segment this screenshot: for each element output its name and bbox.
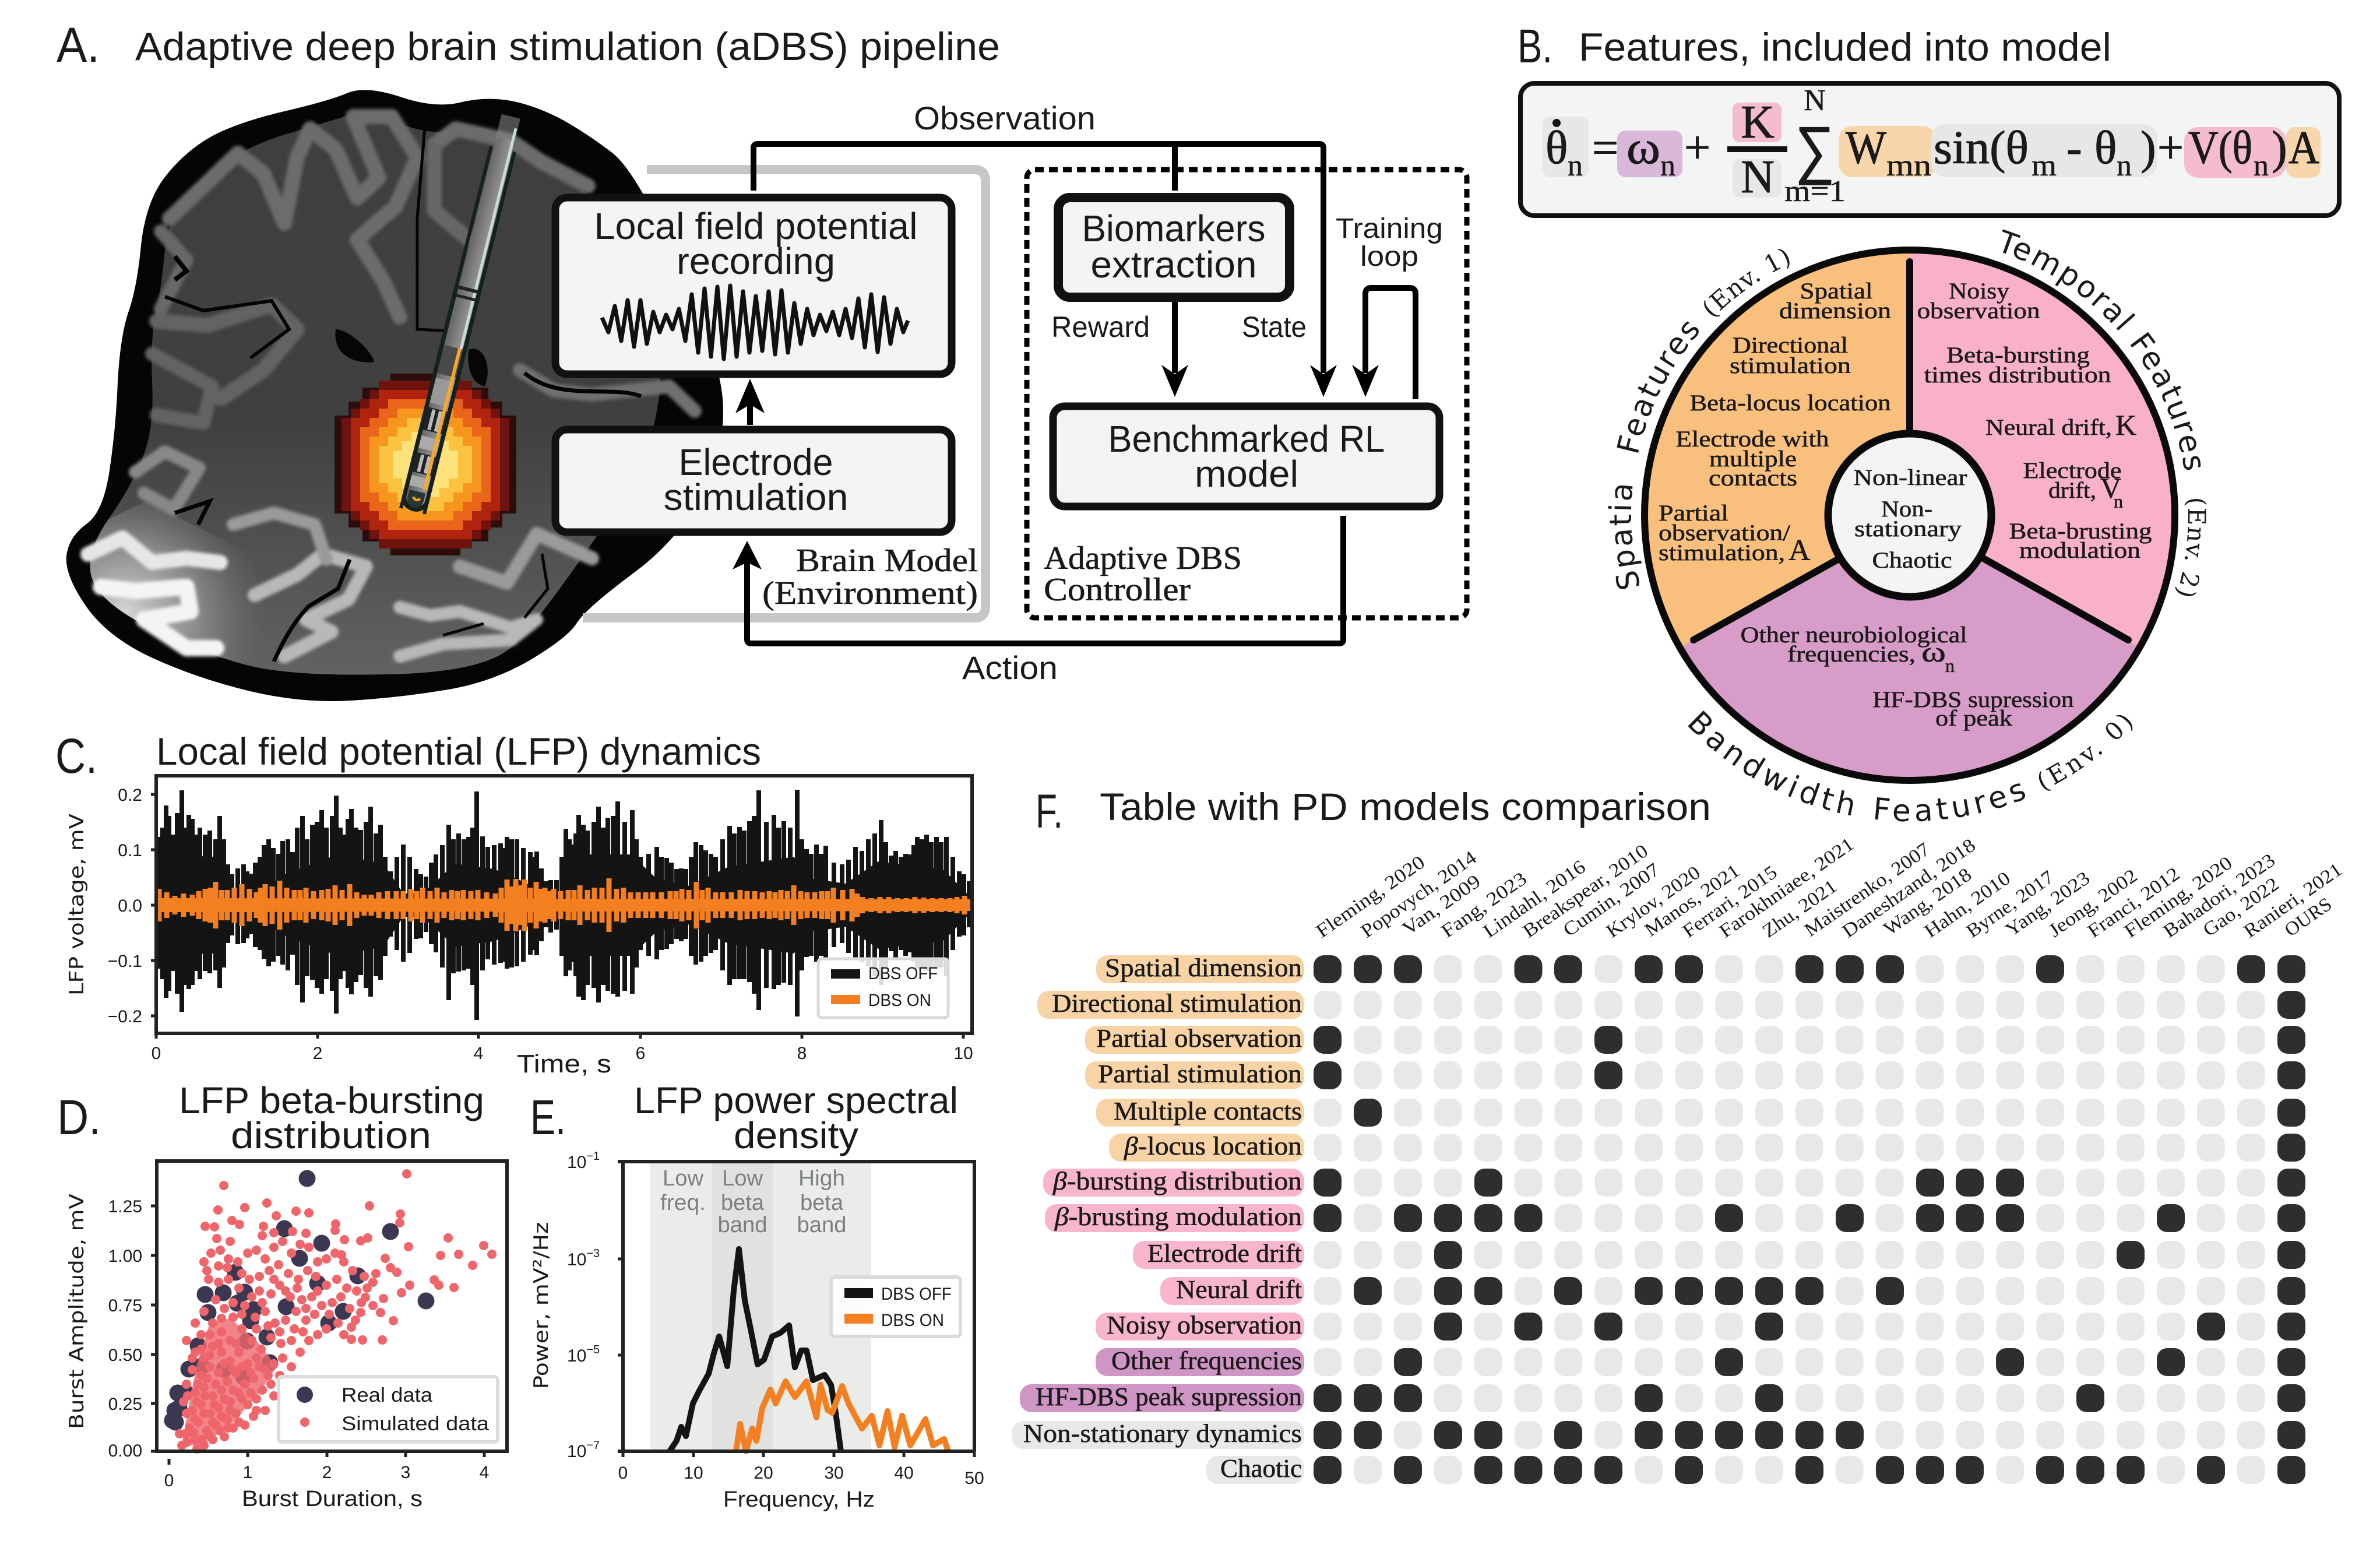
heading F	[1036, 785, 1711, 838]
y axis ticks	[108, 1197, 157, 1461]
spatial feature list: observation/	[1659, 520, 1790, 546]
row: electrode drift	[1133, 1239, 2305, 1269]
arrow: training loop	[1352, 288, 1416, 399]
chart frame	[157, 1161, 507, 1451]
x axis ticks: 4	[474, 1044, 483, 1063]
equation box: W	[1846, 122, 1886, 174]
x axis ticks: 40	[894, 1464, 914, 1483]
y axis ticks	[567, 1150, 623, 1461]
equation box: N	[1741, 152, 1775, 203]
arrow: observation	[754, 144, 1337, 397]
x axis ticks: 20	[754, 1464, 773, 1483]
points: simulated data	[179, 1174, 492, 1449]
spatial feature list: Partial	[1659, 501, 1728, 526]
x axis ticks	[164, 1451, 489, 1490]
column headers: model references: Van, 2009	[1399, 871, 1485, 940]
temporal feature list: Beta-brusting	[2009, 519, 2152, 544]
equation box: ∑	[1795, 114, 1835, 185]
label: state: State	[1242, 311, 1307, 343]
x axis ticks: 8	[797, 1044, 807, 1063]
row: neural drift: Neural drift	[1176, 1275, 1302, 1304]
wheel outline	[1645, 250, 2175, 780]
equation box: A	[2289, 122, 2319, 174]
spatial feature list: contacts	[1709, 466, 1797, 491]
equation box: n	[2117, 149, 2132, 182]
bandwidth feature list	[1740, 622, 2073, 731]
label: training loop: Training	[1336, 213, 1443, 244]
sector: spatial features	[1645, 250, 1910, 648]
equation box: n	[2254, 149, 2269, 182]
label: observation: Observation	[914, 100, 1096, 136]
row: directional stimulation	[1037, 989, 2305, 1019]
box: local field potential recording	[555, 198, 952, 374]
y axis ticks: 0.00	[108, 1441, 142, 1461]
column headers: model references	[1312, 833, 2346, 942]
y axis ticks: 0.25	[108, 1395, 142, 1414]
row: partial stimulation: Partial stimulation	[1098, 1060, 1302, 1088]
bandwidth feature list: ω	[1921, 635, 1946, 668]
box: electrode stimulation	[555, 430, 952, 532]
frequency bands: Low	[663, 1166, 704, 1191]
y axis ticks: 0.75	[108, 1296, 142, 1315]
x axis ticks	[618, 1451, 984, 1488]
legend	[818, 959, 948, 1018]
column headers: model references: Fleming, 2020	[1312, 852, 1429, 942]
column headers: model references: Popovych, 2014	[1357, 847, 1480, 942]
equation box: m	[2032, 149, 2057, 182]
column headers: model references: Ranieri, 2021	[2240, 859, 2346, 942]
row: beta-bursting distribution	[1043, 1167, 2305, 1197]
column headers: model references: Daneshzand, 2018	[1839, 835, 1980, 942]
x axis ticks: 0	[618, 1464, 628, 1483]
row: partial observation: Partial observation	[1096, 1024, 1302, 1053]
row: non-stationary dynamics: Non-stationary dynamics	[1023, 1419, 1302, 1448]
label: brain model environment: (Environment)	[762, 575, 978, 611]
x axis ticks: 0	[152, 1044, 161, 1063]
chart frame	[618, 1162, 974, 1451]
column headers: model references: Hahn, 2010	[1921, 868, 2015, 942]
heading A: A.	[57, 17, 100, 72]
label: reward: Reward	[1051, 311, 1150, 343]
curved label: temporal features	[2002, 229, 2206, 596]
curve: DBS off	[670, 1249, 841, 1451]
temporal feature list: Noisy	[1949, 279, 2010, 304]
row: directional stimulation: Directional stimulation	[1052, 989, 1302, 1018]
panel B: features included into model	[1518, 20, 2342, 822]
curved label: spatial features	[1608, 249, 1790, 589]
electrode	[399, 113, 524, 515]
curved label: bandwidth features: Features	[1875, 783, 2025, 822]
y axis ticks: 0.50	[108, 1346, 142, 1365]
column headers: model references: Wang, 2018	[1880, 864, 1976, 940]
row: beta-brusting modulation: β-brusting modulation	[1054, 1202, 1302, 1231]
column headers: model references: Fang, 2023	[1438, 868, 1531, 942]
column headers: model references: Bahadori, 2023	[2160, 850, 2279, 942]
x axis ticks: 30	[824, 1464, 844, 1483]
box: biomarkers extraction	[1058, 198, 1290, 297]
arrow: stimulation to recording	[735, 379, 765, 425]
equation box: +	[1684, 122, 1710, 174]
column headers: model references: Cumin, 2007	[1559, 859, 1664, 941]
y axis ticks: 10	[567, 1442, 586, 1461]
x axis label: Frequency, Hz	[723, 1487, 875, 1512]
heading D: D.	[57, 1090, 101, 1145]
curved label: spatial features: Spatia	[1608, 485, 1642, 589]
x axis ticks	[152, 1033, 973, 1063]
box: benchmarked RL model: Benchmarked RL	[1108, 418, 1385, 460]
legend: DBS ON	[868, 991, 931, 1010]
box: electrode stimulation: Electrode	[678, 441, 833, 483]
heading B: B.	[1518, 20, 1552, 73]
heading E: E.	[530, 1090, 566, 1145]
frequency bands: beta	[800, 1191, 844, 1215]
adaptive DBS controller boundary	[1027, 170, 1467, 618]
bandwidth feature list: n	[1945, 655, 1955, 676]
panel D: beta-bursting distribution	[57, 1079, 507, 1511]
temporal feature list: observation	[1917, 298, 2040, 323]
column headers: model references: OURS	[2281, 893, 2336, 941]
heading D	[57, 1079, 484, 1156]
equation box: +	[2157, 122, 2184, 174]
sector: bandwidth features	[1680, 515, 2139, 780]
curved label: temporal features: (Env. 2)	[2175, 499, 2206, 596]
temporal feature list: modulation	[2019, 538, 2140, 563]
y axis ticks: 1.25	[108, 1197, 142, 1216]
line chart: PSD	[530, 1150, 984, 1512]
row: multiple contacts: Multiple contacts	[1114, 1097, 1302, 1125]
legend: Simulated data	[341, 1413, 489, 1435]
row: partial observation	[1085, 1024, 2305, 1054]
panel F: PD models comparison table	[1012, 785, 2346, 1484]
heading F: F.	[1036, 785, 1063, 838]
equation box: )	[2140, 122, 2156, 174]
y axis ticks: −7	[586, 1439, 600, 1452]
box: benchmarked RL model: model	[1195, 453, 1298, 495]
brain MRI slice	[69, 92, 721, 699]
x axis ticks: 0	[164, 1471, 174, 1490]
column headers: model references: Manos, 2021	[1641, 860, 1744, 941]
row: electrode drift: Electrode drift	[1147, 1239, 1302, 1268]
spatial feature list: Electrode with	[1676, 427, 1829, 452]
equation box	[1520, 83, 2339, 216]
curved label: bandwidth features	[1688, 710, 2133, 822]
bandwidth feature list: HF-DBS supression	[1873, 687, 2073, 712]
label: brain model environment: Brain Model	[796, 543, 978, 579]
label: action: Action	[962, 649, 1058, 686]
panel C: LFP dynamics	[55, 729, 973, 1078]
points: real data	[172, 1178, 426, 1422]
row: chaotic: Chaotic	[1220, 1454, 1302, 1483]
spatial feature list: stimulation	[1730, 353, 1851, 378]
row: neural drift	[1160, 1275, 2305, 1305]
label: training loop	[1336, 213, 1443, 272]
temporal feature list: V	[2100, 472, 2121, 504]
row: other frequencies: Other frequencies	[1111, 1346, 1302, 1375]
arrow: action	[733, 516, 1343, 643]
trace: DBS off	[156, 790, 969, 1020]
spatial feature list: Directional	[1733, 333, 1848, 358]
x axis ticks: 2	[322, 1463, 332, 1482]
heat map: stimulation field	[335, 374, 516, 555]
curve: DBS on	[736, 1381, 948, 1451]
center circle	[1828, 434, 1991, 597]
row: non-stationary dynamics	[1012, 1419, 2305, 1449]
equation box: sin(θ	[1934, 122, 2029, 174]
x axis ticks: 3	[401, 1463, 410, 1482]
row: multiple contacts	[1096, 1097, 2305, 1127]
column headers: model references: Byrne, 2017	[1963, 867, 2058, 942]
column headers: model references: Breakspear, 2010	[1519, 840, 1652, 942]
row: beta-bursting distribution: β-bursting distribution	[1052, 1167, 1302, 1195]
row: HF-DBS peak supression	[1020, 1382, 2305, 1412]
row: HF-DBS peak supression: HF-DBS peak supression	[1036, 1382, 1302, 1411]
equation box: θ	[1545, 122, 1568, 174]
equation box: V(θ	[2188, 122, 2252, 174]
equation box: N	[1804, 84, 1826, 117]
spatial feature list	[1659, 279, 1891, 567]
temporal feature list: n	[2114, 491, 2123, 512]
y axis ticks: −1	[586, 1150, 600, 1163]
y axis label: LFP voltage, mV	[65, 814, 89, 995]
frequency bands: beta	[721, 1191, 765, 1215]
icon: LFP waveform	[602, 286, 908, 359]
row: beta-brusting modulation	[1045, 1202, 2305, 1232]
column headers: model references: Jeong, 2002	[2045, 866, 2142, 942]
scatter plot	[65, 1161, 507, 1511]
column headers: model references: Fleming, 2020	[2121, 853, 2236, 942]
spatial feature list: Beta-locus location	[1690, 391, 1890, 416]
x axis ticks: 10	[684, 1464, 703, 1483]
row: chaotic	[1206, 1454, 2305, 1484]
label: brain model environment	[762, 543, 978, 611]
row: beta-locus location	[1109, 1132, 2305, 1162]
row: other frequencies	[1096, 1346, 2305, 1376]
panel A: aDBS pipeline	[57, 17, 1467, 699]
box: local field potential recording: recording	[677, 240, 835, 282]
legend: DBS OFF	[881, 1285, 952, 1304]
label: adaptive DBS controller: Adaptive DBS	[1044, 540, 1242, 576]
feature wheel	[1608, 229, 2206, 822]
row: noisy observation	[1096, 1311, 2305, 1341]
column headers: model references: Lindahl, 2016	[1480, 856, 1590, 942]
x axis ticks: 10	[953, 1044, 973, 1063]
column headers: model references: Maistrenko, 2007	[1801, 839, 1934, 941]
panel E: power spectral density	[530, 1079, 984, 1512]
heading C: C.	[55, 729, 97, 783]
equation box: n	[1568, 149, 1583, 182]
bandwidth feature list: of peak	[1935, 706, 2013, 731]
x axis label: Burst Duration, s	[242, 1487, 423, 1511]
y axis ticks: −0.1	[108, 952, 142, 971]
legend	[831, 1277, 960, 1336]
row: spatial dimension: Spatial dimension	[1105, 954, 1302, 982]
spatial feature list: stimulation,	[1659, 540, 1785, 565]
box: local field potential recording: Local field potential	[594, 205, 917, 247]
y axis ticks: 0.0	[118, 896, 142, 916]
column headers: model references: Farokhniaee, 2021	[1716, 833, 1858, 942]
temporal feature list: drift,	[2048, 478, 2096, 503]
sector: temporal features	[1910, 250, 2175, 648]
legend	[279, 1377, 498, 1442]
x axis ticks: 4	[480, 1463, 489, 1482]
equation box: ω	[1626, 122, 1660, 174]
chart frame	[156, 776, 972, 1033]
x axis ticks: 50	[964, 1469, 984, 1488]
y axis label: Power, mV²/Hz	[530, 1222, 553, 1389]
x axis ticks: 6	[636, 1044, 645, 1063]
x axis ticks: 2	[313, 1044, 322, 1063]
y axis ticks: 0.2	[118, 786, 142, 805]
line chart: LFP voltage traces	[65, 776, 973, 1078]
center circle: Non-linear	[1853, 465, 1967, 490]
heading F: Table with PD models comparison	[1100, 785, 1711, 828]
equation box: )	[2272, 122, 2287, 174]
label: adaptive DBS controller	[1044, 540, 1242, 608]
trace: DBS on	[157, 878, 972, 932]
bandwidth feature list: Other neurobiological	[1740, 622, 1967, 648]
curved label: spatial features: (Env. 1)	[1704, 249, 1790, 317]
equation box: K	[1741, 97, 1775, 148]
center circle: stationary	[1854, 516, 1962, 541]
row: spatial dimension	[1096, 954, 2305, 983]
column headers: model references: Gao, 2022	[2199, 874, 2283, 941]
row: beta-locus location: β-locus location	[1124, 1132, 1302, 1160]
column headers: model references: Yang, 2023	[2002, 868, 2094, 941]
frequency bands: Low	[722, 1166, 763, 1191]
column headers: model references: Krylov, 2020	[1603, 862, 1705, 942]
brain model boundary	[583, 170, 985, 618]
y axis ticks: −3	[586, 1247, 600, 1260]
equation box: -	[2066, 122, 2082, 174]
y axis ticks: 10	[567, 1153, 586, 1172]
y axis ticks: 0.1	[118, 841, 142, 860]
row: partial stimulation	[1085, 1060, 2305, 1089]
box: benchmarked RL model	[1053, 406, 1439, 506]
equation box: n	[1660, 149, 1675, 182]
heading C: Local field potential (LFP) dynamics	[156, 730, 761, 773]
column headers: model references: Ferrari, 2015	[1679, 862, 1781, 942]
center circle: Chaotic	[1872, 548, 1952, 573]
equation box: θ	[2094, 122, 2117, 174]
heading E	[530, 1079, 958, 1156]
heading D: distribution	[231, 1114, 431, 1156]
box: biomarkers extraction: extraction	[1091, 244, 1256, 286]
label: adaptive DBS controller: Controller	[1044, 572, 1191, 608]
y axis ticks: 10	[567, 1250, 586, 1269]
y axis ticks: −5	[586, 1343, 600, 1356]
temporal feature list: Electrode	[2023, 458, 2121, 483]
frequency bands: High	[798, 1166, 845, 1191]
y axis ticks: 1.00	[108, 1247, 142, 1266]
curved label: bandwidth features: (Env. 0)	[2039, 715, 2133, 791]
temporal feature list: times distribution	[1924, 363, 2111, 388]
curved label: bandwidth features: Bandwidth	[1688, 710, 1853, 816]
spatial feature list: dimension	[1779, 298, 1891, 323]
temporal feature list: K	[2115, 409, 2136, 441]
heading D: LFP beta-bursting	[179, 1079, 484, 1121]
column headers: model references: Zhu, 2021	[1759, 876, 1841, 942]
heading C	[55, 729, 761, 783]
legend: Real data	[341, 1384, 432, 1406]
temporal feature list: Neural drift,	[1985, 415, 2112, 440]
frequency bands: freq.	[660, 1191, 706, 1215]
temporal feature list: Beta-bursting	[1946, 343, 2090, 368]
legend: DBS OFF	[868, 964, 938, 983]
equation box: mn	[1886, 149, 1931, 182]
heading B: Features, included into model	[1579, 25, 2111, 69]
x axis ticks: 1	[243, 1463, 252, 1482]
heading E: LFP power spectral	[634, 1079, 958, 1121]
frequency bands	[650, 1163, 871, 1450]
y axis ticks: −0.2	[108, 1007, 142, 1026]
column headers: model references: Franci, 2012	[2084, 864, 2184, 942]
temporal feature list	[1917, 279, 2152, 563]
frequency bands: band	[797, 1213, 846, 1237]
spatial feature list: Spatial	[1800, 279, 1873, 304]
curved label: temporal features: Temporal Features	[2002, 229, 2201, 470]
heading A: Adaptive deep brain stimulation (aDBS) pipeline	[135, 24, 1000, 69]
y axis label: Burst Amplitude, mV	[65, 1194, 89, 1429]
label: training loop: loop	[1360, 241, 1418, 272]
frequency bands: band	[718, 1213, 767, 1237]
y axis ticks	[108, 786, 156, 1026]
legend: DBS ON	[881, 1311, 944, 1330]
arrow: reward	[1161, 302, 1188, 397]
curved label: spatial features: Features	[1617, 321, 1699, 453]
box: electrode stimulation: stimulation	[663, 476, 849, 518]
equation box: m=1	[1784, 175, 1846, 208]
center circle: Non-	[1881, 497, 1932, 522]
spatial feature list: multiple	[1709, 446, 1797, 472]
bandwidth feature list: frequencies,	[1787, 642, 1916, 667]
row: noisy observation: Noisy observation	[1107, 1311, 1302, 1339]
heading E: density	[734, 1114, 858, 1156]
box: biomarkers extraction: Biomarkers	[1082, 207, 1266, 249]
spatial feature list: A	[1788, 534, 1811, 567]
y axis ticks: 10	[567, 1346, 586, 1366]
x axis label: Time, s	[517, 1050, 611, 1078]
wheel dividers	[1694, 262, 2128, 640]
equation box: =	[1592, 122, 1618, 174]
